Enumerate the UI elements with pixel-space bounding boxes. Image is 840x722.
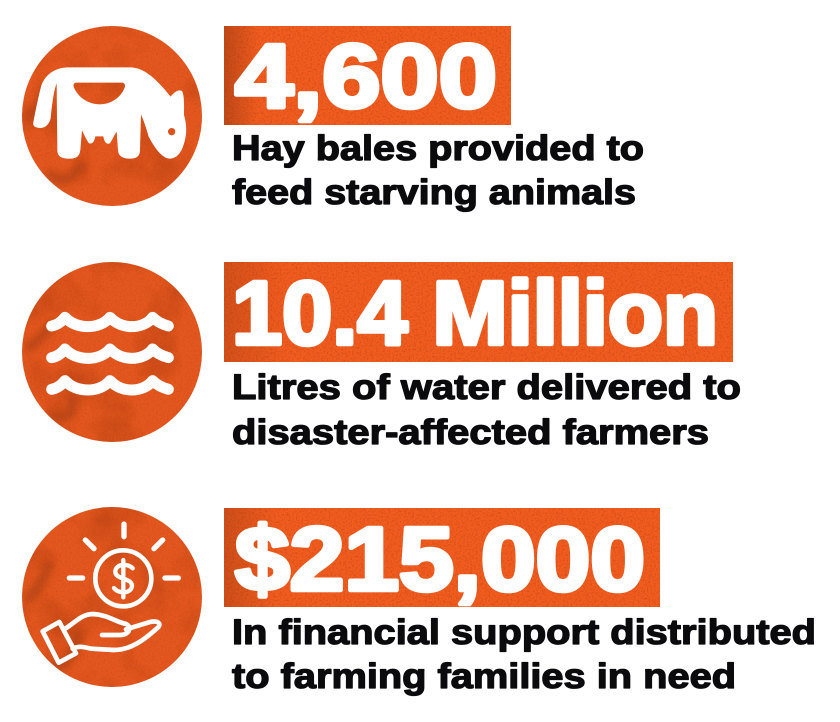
stat row: financial support bbox=[22, 507, 816, 696]
text: hay bales description bbox=[232, 129, 644, 212]
text: hay bales description: Hay bales provided to bbox=[232, 129, 644, 168]
text: hay bales description: feed starving animals bbox=[232, 173, 636, 212]
text: water description: disaster-affected farmers bbox=[232, 413, 709, 452]
stat row: hay bales bbox=[22, 26, 644, 212]
banner: 10.4 Million: 10.4 Million bbox=[232, 264, 718, 364]
text: water description bbox=[232, 368, 741, 452]
text: financial support description bbox=[232, 613, 816, 696]
stat row: water bbox=[22, 262, 741, 452]
icon: cow in orange circle bbox=[22, 26, 202, 206]
text: financial support description: to farming families in need bbox=[232, 657, 736, 696]
banner: $215,000: $215,000 bbox=[235, 510, 645, 610]
icon: water waves in orange circle bbox=[22, 262, 202, 442]
text: financial support description: In financial support distributed bbox=[232, 613, 816, 652]
icon: hand holding coin in orange circle bbox=[22, 507, 202, 687]
text: water description: Litres of water delivered to bbox=[232, 368, 741, 407]
banner: 4,600: 4,600 bbox=[235, 27, 497, 127]
